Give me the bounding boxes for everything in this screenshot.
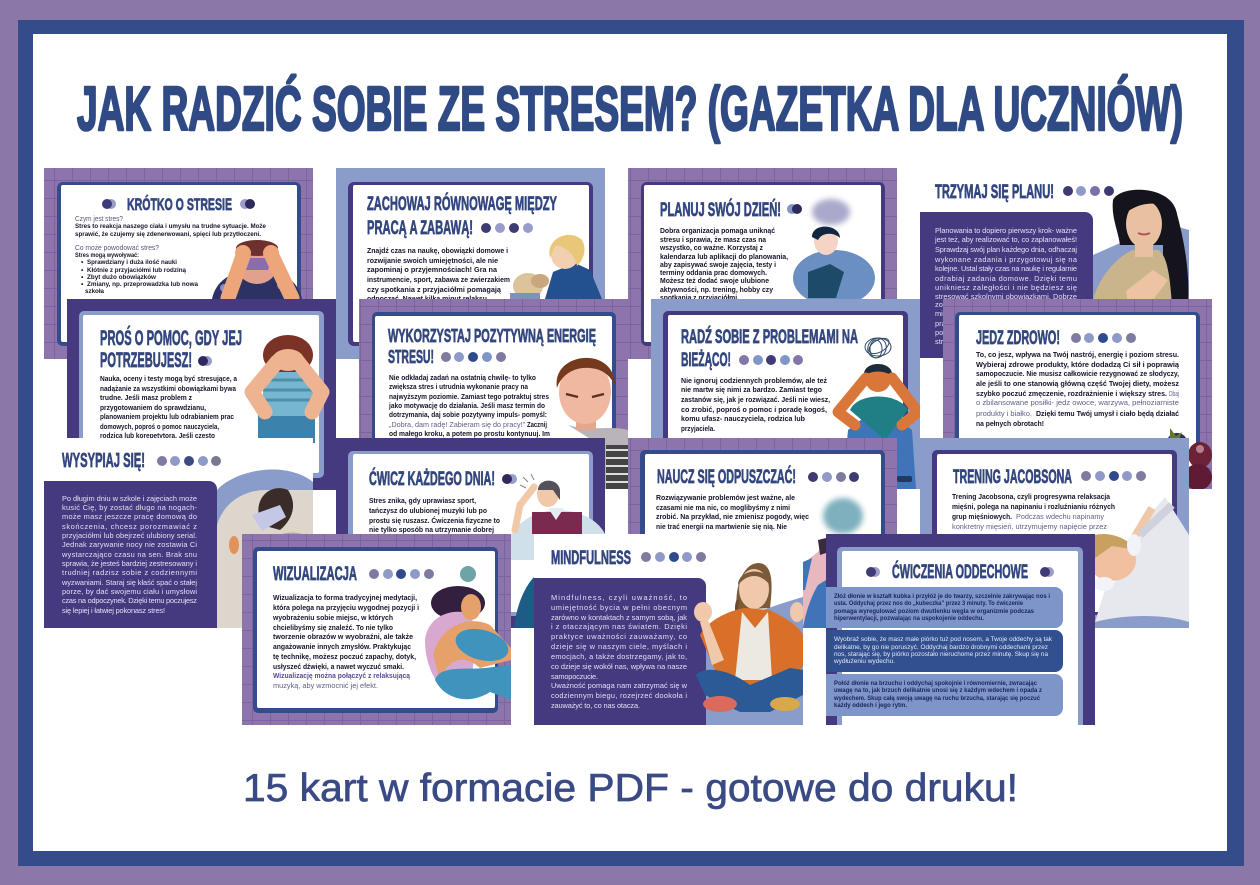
- text: visualization body: wyobrażeniu sobie miejsc, w których: [272, 613, 393, 622]
- icon: heading dots: [739, 355, 803, 365]
- text panel: sleep: kusić Cię, by zostać długo na nogach-: [62, 503, 198, 512]
- icon: girl covering face: [252, 335, 322, 443]
- text panel: mindfulness: dzieje się w naszym ciele, myślach i: [551, 642, 687, 651]
- text: let go body: [656, 493, 809, 531]
- text: exercise body: Stres znika, gdy uprawiasz sport,: [369, 496, 476, 505]
- text panel: sleep: porze, by dać swojemu ciału i umysłowi: [62, 587, 197, 596]
- text: visualization body: chcielibyśmy się znaleźć. To nie tylko: [273, 623, 393, 632]
- text: what is stress: Co może powodować stres?: [75, 245, 159, 252]
- shape: blue backdrop: [1093, 223, 1189, 299]
- heading: Trzymaj się planu: TRZYMAJ SIĘ PLANU!: [935, 182, 1054, 203]
- text: problems body: komu ufasz- nauczyciela, rodzica lub: [681, 414, 805, 423]
- exercise box 2: nos, starając się, by piórko pozostało nieruchome przez minutę. Skup się na: [834, 651, 1049, 658]
- text: exercise body: [369, 496, 500, 534]
- footer caption: 15 kart w formacie PDF - gotowe do druku!: [243, 767, 1018, 810]
- text panel: mindfulness: umiejętność bycia w pełni obecnym: [551, 603, 687, 612]
- text: let go body: czasami nie ma nic, co moglibyśmy z nimi: [656, 503, 790, 512]
- text: visualization body: Wizualizacja to forma tradycyjnej medytacji,: [273, 593, 417, 602]
- icon: heading dots: [481, 223, 533, 233]
- heading: Wykorzystaj: WYKORZYSTAJ POZYTYWNĄ ENERGIĘ: [388, 326, 596, 346]
- exercise box 2: delikatne, by go nie poruszyć. Oddychaj bardzo drobnymi oddechami przez: [834, 644, 1048, 651]
- text panel: mindfulness: codziennym biegu, rozejrzeć dookoła i: [551, 691, 687, 700]
- text: visualization body: Wizualizację można połączyć z relaksującą: [273, 671, 411, 680]
- text: let go body: Rozwiązywanie problemów jest ważne, ale: [656, 493, 795, 502]
- heading: Wysypiaj się: WYSYPIAJ SIĘ!: [62, 450, 145, 472]
- text panel: keep the plan: zorganizowany: [935, 300, 985, 309]
- text: eat healthy body: produkty i białko.: [976, 409, 1032, 418]
- text panel: mindfulness: co dzieje się wokół nas, wpływa na nasze: [551, 662, 687, 671]
- icon: frowning boy: [557, 358, 628, 489]
- text: plan body: Dobra organizacja pomaga uniknąć: [660, 226, 775, 235]
- text panel: sleep: skończenia, chcesz porozmawiać z: [62, 522, 197, 531]
- heading: Ćwiczenia oddechowe: ĆWICZENIA ODDECHOWE: [892, 561, 1028, 583]
- exercise box 1: hiperwentylacji, pozwalając na uspokojenie oddechu.: [834, 615, 984, 622]
- panel: Trzymaj się planu: [920, 168, 1190, 359]
- text: what is stress: •: [81, 274, 84, 281]
- heading: Radź sobie: [681, 326, 858, 371]
- text panel: mindfulness: Uważność pomaga nam zatrzymać się w: [551, 681, 688, 690]
- heading: Zachowaj równowagę: [367, 193, 557, 239]
- text: balance body: instrumencie, sport, zabawa ze zwierzakiem: [367, 275, 510, 284]
- icon: heading dots: [157, 456, 221, 466]
- text: problems body: co zrobić, poproś o pomoc i poradę kogoś,: [681, 405, 827, 414]
- text: energy body: od małego kroku, a potem po prostu kontynuuj. Im: [389, 429, 550, 438]
- text: what is stress: Stres to reakcja naszego ciała i umysłu na trudne sytuacje. Może: [75, 223, 266, 230]
- text: balance body: rozwijanie swoich umiejętności, ale nie: [367, 256, 498, 265]
- text: what is stress: Zmiany, np. przeprowadzka lub nowa: [87, 281, 198, 288]
- text: exercise body: prostu się ruszasz. Ćwiczenia fizyczne to: [369, 516, 500, 525]
- text: what is stress: Czym jest stres?: [75, 216, 123, 223]
- icon: heading dots: [198, 356, 212, 366]
- icon: sitting woman: [425, 566, 512, 700]
- icon: stressed girl: [212, 240, 302, 299]
- panel: Naucz się odpuszczać: [628, 438, 897, 628]
- text panel: mindfulness: praktyce uważności zauważamy, co: [551, 632, 687, 641]
- icon: man holding head: [506, 474, 605, 628]
- text panel: keep the plan: miesiąc: [935, 309, 960, 318]
- heading: Wykorzystaj: [388, 328, 596, 364]
- text: what is stress: [75, 216, 266, 295]
- text: plan body: terminy oddania prac domowych.: [660, 268, 767, 277]
- text panel: sleep: Po długim dniu w szkole i zajęciach może: [62, 494, 197, 503]
- text: Jacobson body: grup mięśniowych.: [952, 512, 1012, 521]
- text: problems body: Nie ignoruj codziennych problemów, ale też: [681, 376, 827, 385]
- icon: heading dots: [808, 472, 859, 482]
- text: what is stress: sprawić, że czujemy się zdenerwowani, spięci lub przytłoczeni.: [75, 231, 261, 238]
- panel: Proś o pomoc: [67, 299, 336, 490]
- text panel: mindfulness: zarówno w kontaktach z samym sobą, jak: [551, 613, 687, 622]
- exercise box 3: Połóż dłonie na brzuchu i oddychaj spokojnie i równomiernie, zwracając: [834, 680, 1038, 687]
- text: eat healthy body: na pełnych obrotach!: [976, 419, 1044, 428]
- text: eat healthy body: Wybieraj zdrowe produkty, które dodadzą Ci sił i poprawią: [976, 360, 1180, 369]
- heading: Wizualizacja: WIZUALIZACJA: [273, 564, 357, 585]
- text: plan body: aby zapisywać swoje zajęcia, testy i: [660, 260, 776, 269]
- heading: Wykorzystaj: STRESU!: [388, 347, 434, 367]
- text panel: mindfulness: emocjach, a także dostrzegamy, jak to,: [551, 652, 687, 661]
- text: problems body: [681, 376, 830, 433]
- icon: heading dots: [369, 569, 434, 579]
- text: balance body: czy spotkania z przyjaciółmi pomagają: [367, 285, 502, 294]
- icon: fruit and vegetables: [1167, 428, 1212, 490]
- exercise box 3: uwagę na to, jak brzuch delikatnie unosi się z każdym wdechem i opada z: [834, 687, 1042, 694]
- icon: heading dots: [502, 474, 517, 484]
- exercise box 2: Wyobraź sobie, że masz małe piórko tuż pod nosem, a Twoje oddechy są tak: [834, 636, 1053, 643]
- text panel: keep the plan: praca: [935, 319, 954, 328]
- text panel: mindfulness: samopoczucie.: [551, 672, 598, 681]
- panel: Radź sobie z problemami: [651, 299, 920, 489]
- text panel: sleep: przyjaciółmi lub obejrzeć ulubiony serial.: [62, 531, 197, 540]
- text: what is stress: •: [81, 267, 84, 274]
- heading: Zachowaj równowagę: ZACHOWAJ RÓWNOWAGĘ MIĘDZY: [367, 193, 557, 215]
- text: visualization body: która polega na przyjęciu wygodnej pozycji i: [273, 603, 419, 612]
- text: Jacobson body: Podczas wdechu napinamy: [1016, 512, 1104, 521]
- text: eat healthy body: Dbaj: [1169, 389, 1179, 398]
- icon: heading dots: [1081, 471, 1146, 481]
- heading: Ćwicz: ĆWICZ KAŻDEGO DNIA!: [369, 468, 495, 490]
- panel: Krótko o stresie: [44, 168, 313, 359]
- text: eat healthy body: o zbilansowane posiłki- jedz owoce, warzywa, pełnoziarniste: [976, 398, 1179, 407]
- text panel: keep the plan: [920, 212, 1093, 358]
- icon: heading dots right: [240, 199, 255, 209]
- text: problems body: nie martw się nimi za bardzo. Zamiast tego: [681, 385, 822, 394]
- icon: heading dots right: [1040, 567, 1054, 577]
- icon: sleeping person photo: [217, 470, 313, 628]
- text: what is stress: Zbyt dużo obowiązków: [87, 274, 157, 281]
- text panel: sleep: trudniej radzisz sobie z codziennymi: [62, 568, 197, 577]
- text: Jacobson body: Trening Jacobsona, czyli progresywna relaksacja: [952, 492, 1111, 501]
- text: energy body: dotrzymania, daj sobie pozytywny impuls- pomyśl:: [389, 410, 547, 419]
- heading: Radź sobie: RADŹ SOBIE Z PROBLEMAMI NA: [681, 326, 858, 348]
- text: help body: trudne. Jeśli masz problem z: [100, 393, 192, 402]
- text: energy body: Zacznij: [527, 420, 547, 429]
- text panel: sleep: czas na odpoczynek. Dzięki temu poczujesz: [62, 596, 197, 605]
- text: eat healthy body: [976, 350, 1180, 428]
- text: exercise body: tańczysz do ulubionej muzyki lub po: [369, 506, 487, 515]
- text: visualization body: tworzenie obrazów w wyobraźni, ale także: [273, 632, 413, 641]
- text: let go body: nie trać energii na martwienie się nią. Nie: [656, 522, 787, 531]
- panel: Ćwicz każdego dnia: [336, 438, 605, 628]
- text: problems body: zastanów się, jak je rozwiązać. Jeśli nie wiesz,: [681, 395, 830, 404]
- text: what is stress: Sprawdziany i duża ilość nauki: [87, 259, 177, 266]
- text panel: sleep: [44, 481, 217, 628]
- text: help body: Nauka, oceny i testy mogą być stresujące, a: [100, 374, 238, 383]
- text: balance body: zapominaj o przyjemnościach! Gra na: [367, 265, 498, 274]
- text: what is stress: szkoła: [85, 288, 104, 295]
- text: eat healthy body: ale jeśli to one stanowią główną część Twojej diety, możesz: [976, 379, 1179, 388]
- text panel: keep the plan: kolejne. Ustal stały czas na naukę i regularnie: [935, 264, 1077, 273]
- text: problems body: przyjaciela.: [681, 424, 715, 433]
- text: help body: nadążanie za wszystkimi obowiązkami bywa: [100, 384, 237, 393]
- exercise box 2: [826, 630, 1063, 672]
- text: let go body: zrobić. Na przykład, nie zmienisz pogody, więc: [656, 512, 809, 521]
- icon: heading dots: [1071, 333, 1136, 343]
- text: plan body: wszystko, co ważne. Korzystaj z: [659, 243, 763, 252]
- heading: Krótko o stresie: KRÓTKO O STRESIE: [127, 195, 232, 214]
- text: energy body: Nie odkładaj zadań na ostatnią chwilę- to tylko: [389, 373, 536, 382]
- heading: Trening Jacobsona: TRENING JACOBSONA: [953, 467, 1072, 488]
- text: visualization body: angażowanie innych zmysłów. Praktykując: [273, 642, 411, 651]
- panel: Wizualizacja: [242, 534, 512, 725]
- text: visualization body: tę technikę, możesz poczuć zapachy, dotyk,: [273, 652, 416, 661]
- text: eat healthy body: To, co jesz, wpływa na Twój nastrój, energię i poziom stresu.: [976, 350, 1179, 359]
- text panel: mindfulness: [534, 578, 706, 725]
- text: energy body: najwyższym poziomie. Zamiast tego potraktuj stres: [389, 392, 549, 401]
- text panel: keep the plan: odrabiaj zadania domowe. Dzięki temu: [935, 274, 1077, 283]
- panel: Jedz zdrowo: [943, 299, 1212, 490]
- heading: Proś o pomoc: PROŚ O POMOC, GDY JEJ: [100, 326, 242, 350]
- heading: Naucz się: NAUCZ SIĘ ODPUSZCZAĆ!: [657, 466, 796, 488]
- exercise box 3: każdy oddech i jego rytm.: [834, 702, 907, 709]
- text: plan body: spotkania z przyjaciółmi.: [660, 293, 739, 302]
- panel: Mindfulness: [534, 534, 804, 725]
- heading: Zachowaj równowagę: PRACĄ A ZABAWĄ!: [367, 218, 473, 239]
- exercise box 1: pomaga wyregulować poziom dwutlenku węgla w organizmie podczas: [834, 608, 1035, 615]
- text: plan body: stresu i sprawia, że masz czas na: [660, 235, 767, 244]
- text: help body: planowaniem projektu lub odrabianiem prac: [100, 412, 234, 421]
- text: what is stress: Kłótnie z przyjaciółmi lub rodziną: [87, 267, 186, 274]
- text panel: sleep: Jednak zarywanie nocy nie zostawia Ci: [62, 540, 197, 549]
- icon: heading dots left: [102, 199, 116, 209]
- text: help body: rodzica lub korepetytora. Jeśli często: [100, 431, 215, 440]
- text: visualization body: usłyszeć dźwięki, a nawet wyczuć smaki.: [273, 662, 404, 671]
- text panel: sleep: wyzwaniami. Staraj się kłaść spać o stałej: [61, 578, 197, 587]
- text: Jacobson body: konkretny mięsień, utrzymujemy napięcie przez: [952, 522, 1107, 531]
- text: eat healthy body: szybko poczuć zmęczenie, rozdrażnienie i większy stres.: [976, 389, 1167, 398]
- exercise box 3: wydechem. Skup całą swoją uwagę na ruchu brzucha, starając się poczuć: [833, 695, 1041, 702]
- exercise box 1: [826, 587, 1063, 628]
- text: energy body: [388, 373, 550, 438]
- heading: Jedz zdrowo: JEDZ ZDROWO!: [976, 328, 1060, 349]
- text panel: keep the plan: Sprawdzaj swój plan każdego dnia, odhaczaj: [935, 245, 1077, 254]
- exercise box 1: usta. Oddychaj przez nos do „kubeczka” przez 3 minuty. To ćwiczenie: [834, 600, 1024, 607]
- text panel: mindfulness: i z otaczającym nas światem. Dzięki: [551, 622, 687, 631]
- text: plan body: aktywności, np. trening, hobby czy: [660, 285, 774, 294]
- text panel: keep the plan: unikniesz zaległości i nie będziesz się: [935, 283, 1077, 292]
- text: eat healthy body: Dzięki temu Twój umysł i ciało będą działać: [1036, 409, 1179, 418]
- text: help body: domowych, poproś o pomoc nauczyciela,: [100, 422, 219, 431]
- text: help body: przygotowaniem do sprawdzianu,: [100, 403, 206, 412]
- heading: Proś o pomoc: POTRZEBUJESZ!: [100, 349, 192, 372]
- icon: person under cloud: [793, 199, 875, 306]
- text: plan body: Możesz też dodać swoje ulubione: [660, 276, 769, 285]
- panel: Trening Jacobsona: [920, 438, 1189, 628]
- icon: boy with dog: [510, 235, 602, 299]
- panel: Wykorzystaj pozytywną energię: [359, 299, 628, 489]
- exercise box 2: wydłużeniu wydechu.: [833, 658, 895, 665]
- text panel: sleep: wystarczająco czasu na sen. Brak snu: [61, 550, 197, 559]
- text panel: mindfulness: zauważyć to, co nas otacza.: [551, 701, 640, 710]
- text: balance body: [367, 246, 510, 303]
- text: Jacobson body: mięśni, polega na napinaniu i rozluźnianiu różnych: [952, 502, 1115, 511]
- exercise box 1: Złóż dłonie w kształt kubka i przyłóż je do twarzy, szczelnie zakrywając nos i: [834, 593, 1050, 600]
- shape: blue backdrop: [706, 597, 803, 725]
- exercise box 3: [826, 674, 1063, 716]
- text: plan body: [659, 226, 788, 302]
- text panel: keep the plan: stres: [935, 337, 951, 346]
- text: what is stress: •: [81, 259, 84, 266]
- icon: teal cloud: [823, 498, 863, 534]
- text panel: keep the plan: wykonane zadania i przygotowuj się na: [934, 255, 1078, 264]
- panel: Wysypiaj się: [44, 438, 313, 628]
- panel: Ćwiczenia oddechowe: [826, 534, 1095, 737]
- icon: heading dots: [1063, 186, 1114, 196]
- text panel: mindfulness: Mindfulness, czyli uważność, to: [551, 593, 687, 602]
- icon: heading dots: [787, 204, 802, 214]
- heading: Mindfulness: MINDFULNESS: [551, 548, 631, 569]
- text: energy body: zwiększa stres i utrudnia wykonanie pracy na: [389, 382, 529, 391]
- text panel: sleep: sprawia, że jesteś bardziej zestresowany i: [62, 559, 197, 568]
- text panel: keep the plan: Planowania to dopiero pierwszy krok- ważne: [935, 226, 1077, 235]
- text: balance body: odpocząć. Nawet kilka minut relaksu: [367, 294, 487, 303]
- text: help body: [100, 374, 238, 440]
- icon: relaxing man with headphones: [1088, 497, 1189, 628]
- text: exercise body: nie tylko sposób na utrzymanie dobrej: [369, 525, 494, 534]
- text: visualization body: muzyką, aby wzmocnić jej efekt.: [273, 681, 378, 690]
- text: Jacobson body: [952, 492, 1115, 531]
- text: eat healthy body: samopoczucie. Nie musisz całkowicie rezygnować ze słodyczy,: [976, 369, 1179, 378]
- heading: Radź sobie: BIEŻĄCO!: [681, 350, 731, 371]
- icon: calm woman: [1092, 190, 1188, 304]
- text: energy body: „Dobra, dam radę! Zabieram się do pracy!”: [389, 420, 526, 429]
- text: visualization body: [272, 593, 419, 690]
- icon: heading dots: [441, 352, 506, 362]
- panel: Planuj swój dzień: [628, 168, 897, 359]
- text: balance body: Znajdź czas na naukę, obowiązki domowe i: [367, 246, 508, 255]
- text panel: keep the plan: stresować szkolnymi obowiązkami. Dobrze: [935, 292, 1077, 301]
- icon: heading dots left: [866, 567, 880, 577]
- panel: Zachowaj równowagę: [336, 168, 605, 359]
- text: energy body: jako motywację do działania. Jeśli masz termin do: [388, 401, 545, 410]
- text: what is stress: •: [81, 281, 84, 288]
- icon: worried man: [838, 335, 918, 489]
- icon: meditating girl: [694, 563, 804, 712]
- text panel: keep the plan: pozwoli: [935, 328, 960, 337]
- icon: heading dots: [641, 552, 706, 562]
- text panel: sleep: może masz jeszcze pracę domową do: [62, 512, 197, 521]
- text: what is stress: Stres mogą wywoływać:: [75, 252, 139, 259]
- text: plan body: kalendarza lub aplikacji do planowania,: [660, 252, 788, 261]
- heading: Proś o pomoc: [100, 326, 242, 372]
- text panel: sleep: się lepiej i łatwiej pokonasz stres!: [62, 606, 165, 615]
- icon: partial figure: [803, 538, 826, 628]
- heading: Planuj swój dzień: PLANUJ SWÓJ DZIEŃ!: [660, 199, 781, 221]
- text panel: keep the plan: jest też, aby realizować to, co zaplanowałeś!: [934, 235, 1077, 244]
